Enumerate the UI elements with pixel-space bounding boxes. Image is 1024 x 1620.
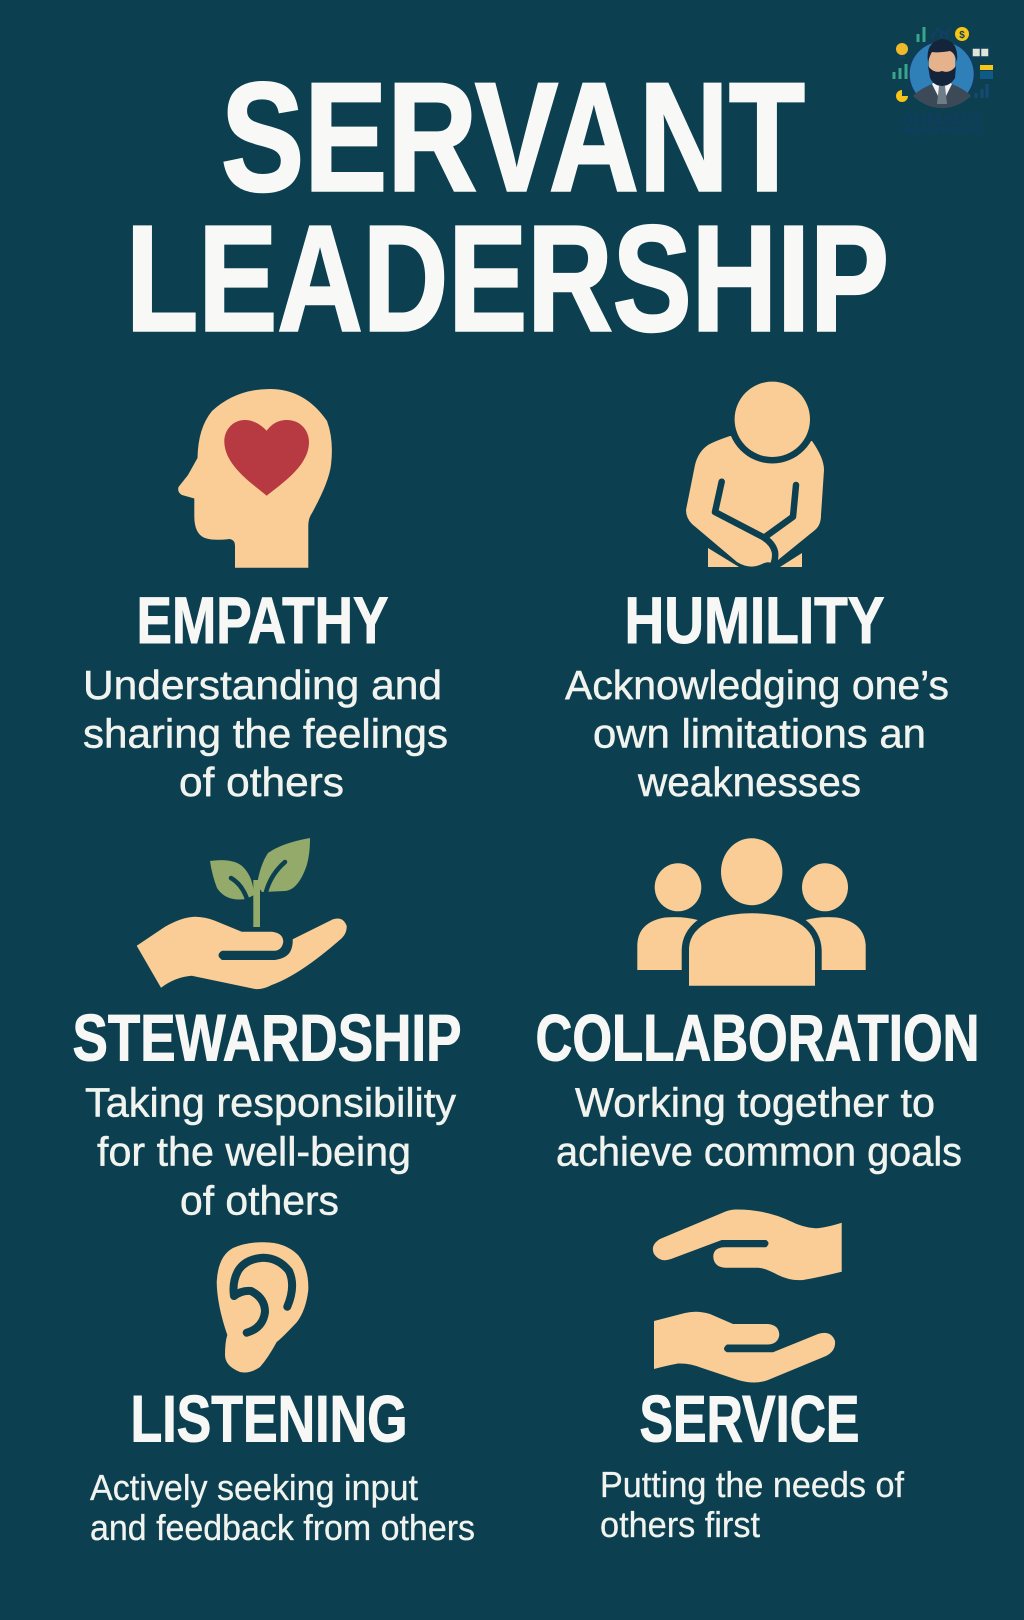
text: humility description: weaknesses [637, 759, 861, 805]
text: listening description [90, 1467, 475, 1548]
icon: group of people [637, 838, 866, 986]
logo: Ahmad's Knowledge Hub: KNOWLEDGE HUB [902, 126, 983, 135]
text: stewardship description: for the well-being [97, 1128, 411, 1174]
icon: head with heart [178, 389, 332, 568]
text: empathy description: of others [179, 759, 344, 805]
icon: caring hands [653, 1209, 842, 1382]
text: humility description [565, 662, 949, 805]
text: stewardship description [85, 1080, 456, 1224]
panel: collaboration [536, 838, 980, 1174]
text: stewardship description: Taking responsibility [85, 1080, 456, 1126]
logo: Ahmad's Knowledge Hub: AHMAD'S [902, 111, 982, 128]
logo: Ahmad's Knowledge Hub [894, 27, 993, 135]
panel: stewardship [72, 838, 462, 1224]
icon: hand holding sprout [137, 838, 347, 989]
icon: bowing person [686, 372, 824, 567]
heading: empathy: EMPATHY [136, 583, 388, 657]
panel: humility [565, 372, 949, 805]
text: empathy description [83, 662, 448, 805]
panel: service [600, 1209, 905, 1545]
heading: stewardship: STEWARDSHIP [72, 1000, 462, 1074]
title: SERVANT [221, 50, 805, 224]
text: collaboration description: Working together to [575, 1080, 935, 1126]
panel: listening [90, 1242, 475, 1548]
text: stewardship description: of others [180, 1178, 339, 1224]
text: service description: others first [600, 1504, 760, 1545]
title [126, 50, 889, 362]
text: listening description: Actively seeking input [90, 1467, 418, 1508]
text: listening description: and feedback from others [90, 1507, 475, 1548]
text: collaboration description [556, 1080, 962, 1174]
icon: ear [217, 1242, 308, 1372]
text: humility description: Acknowledging one’s [565, 662, 949, 708]
logo: Ahmad's Knowledge Hub: $ [959, 30, 965, 41]
text: service description: Putting the needs of [600, 1464, 905, 1505]
panel: empathy [83, 389, 448, 805]
text: service description [600, 1464, 905, 1545]
text: humility description: own limitations an [593, 710, 926, 756]
text: empathy description: Understanding and [83, 662, 442, 708]
text: empathy description: sharing the feelings [83, 710, 448, 756]
text: collaboration description: achieve common goals [556, 1128, 962, 1174]
heading: listening: LISTENING [130, 1382, 408, 1456]
heading: humility: HUMILITY [624, 583, 884, 657]
heading: service: SERVICE [640, 1382, 860, 1456]
